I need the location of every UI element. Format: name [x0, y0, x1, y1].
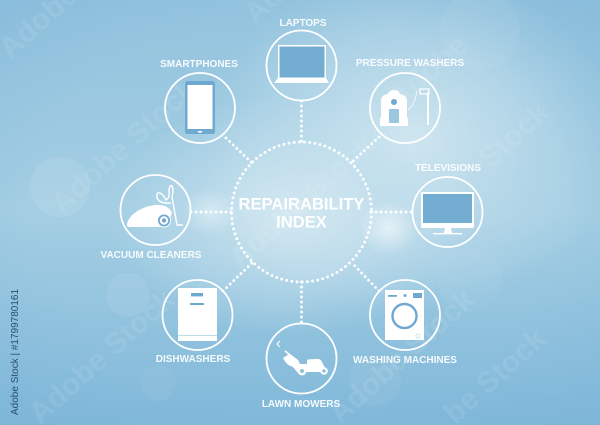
node: pressure washers: PRESSURE WASHERS	[356, 58, 465, 69]
node: lawn mowers: LAWN MOWERS	[262, 399, 340, 410]
node: dishwashers	[156, 280, 232, 365]
node: vacuum cleaners	[101, 175, 202, 261]
watermark: Adobe Stock	[223, 128, 381, 275]
node: smartphones	[160, 59, 238, 143]
watermark: Adobe	[383, 28, 474, 115]
heading: INDEX	[276, 212, 327, 232]
heading: REPAIRABILITY	[238, 194, 364, 214]
side credit: Adobe Stock | #1799780161	[10, 289, 21, 415]
node: washing machines: WASHING MACHINES	[353, 355, 457, 366]
watermark: Adobe Stock	[45, 73, 203, 220]
node: televisions	[412, 163, 482, 247]
node: pressure washers	[356, 58, 465, 143]
node: televisions: TELEVISIONS	[415, 163, 481, 174]
heading	[238, 194, 364, 232]
node: vacuum cleaners: VACUUM CLEANERS	[101, 250, 202, 261]
node: smartphones: SMARTPHONES	[160, 59, 238, 70]
node: lawn mowers	[262, 324, 340, 410]
node: dishwashers: DISHWASHERS	[156, 354, 231, 365]
node: laptops	[266, 18, 336, 100]
watermark: Stock	[473, 96, 556, 175]
central circle	[232, 142, 372, 282]
connectors	[191, 101, 412, 323]
node: washing machines	[353, 280, 457, 366]
node: laptops: LAPTOPS	[279, 18, 327, 29]
